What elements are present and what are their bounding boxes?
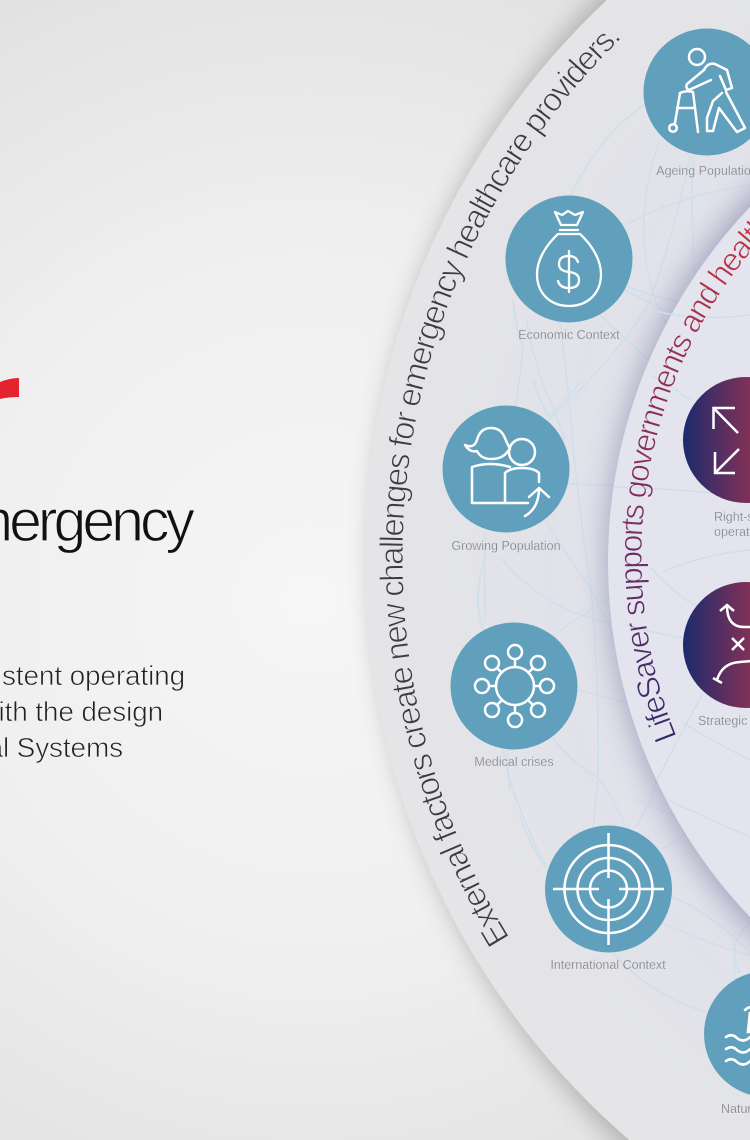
icon: virus <box>475 645 554 727</box>
factor: growing population <box>442 406 570 553</box>
factor: ageing population <box>644 28 750 178</box>
icon: target <box>553 833 664 945</box>
inner network lines <box>613 310 750 837</box>
icon: resize arrows <box>714 408 739 473</box>
logo fragment <box>0 378 19 399</box>
capability: strategic: Strategic <box>698 714 747 728</box>
icon: person with walker <box>669 49 745 132</box>
inner disc <box>608 47 750 1077</box>
network lines <box>478 105 750 1012</box>
factor: international context: International Context <box>550 958 666 972</box>
factor: growing population: Growing Population <box>451 539 561 553</box>
icon: two people with growth arrow <box>465 428 549 516</box>
intro text <box>0 660 185 763</box>
factor: natural disasters <box>704 971 750 1116</box>
factor: international context <box>545 826 672 972</box>
curved heading: external factors: External factors create new challenges for emergency healthcare providers. <box>380 34 620 947</box>
factor: economic context <box>506 196 632 342</box>
factor: medical crises: Medical crises <box>474 755 554 769</box>
factor: economic context: Economic Context <box>518 328 620 342</box>
outer disc <box>364 0 750 1140</box>
capability: strategic <box>683 582 750 728</box>
inner disc shadow <box>607 32 750 1092</box>
icon: money bag <box>537 211 601 306</box>
outer disc shadow <box>371 0 750 1140</box>
factor: medical crises <box>450 622 578 769</box>
capability: right-sized operations <box>683 377 750 539</box>
icon: strategy arrows <box>713 605 750 683</box>
icon: waves <box>726 1007 750 1064</box>
